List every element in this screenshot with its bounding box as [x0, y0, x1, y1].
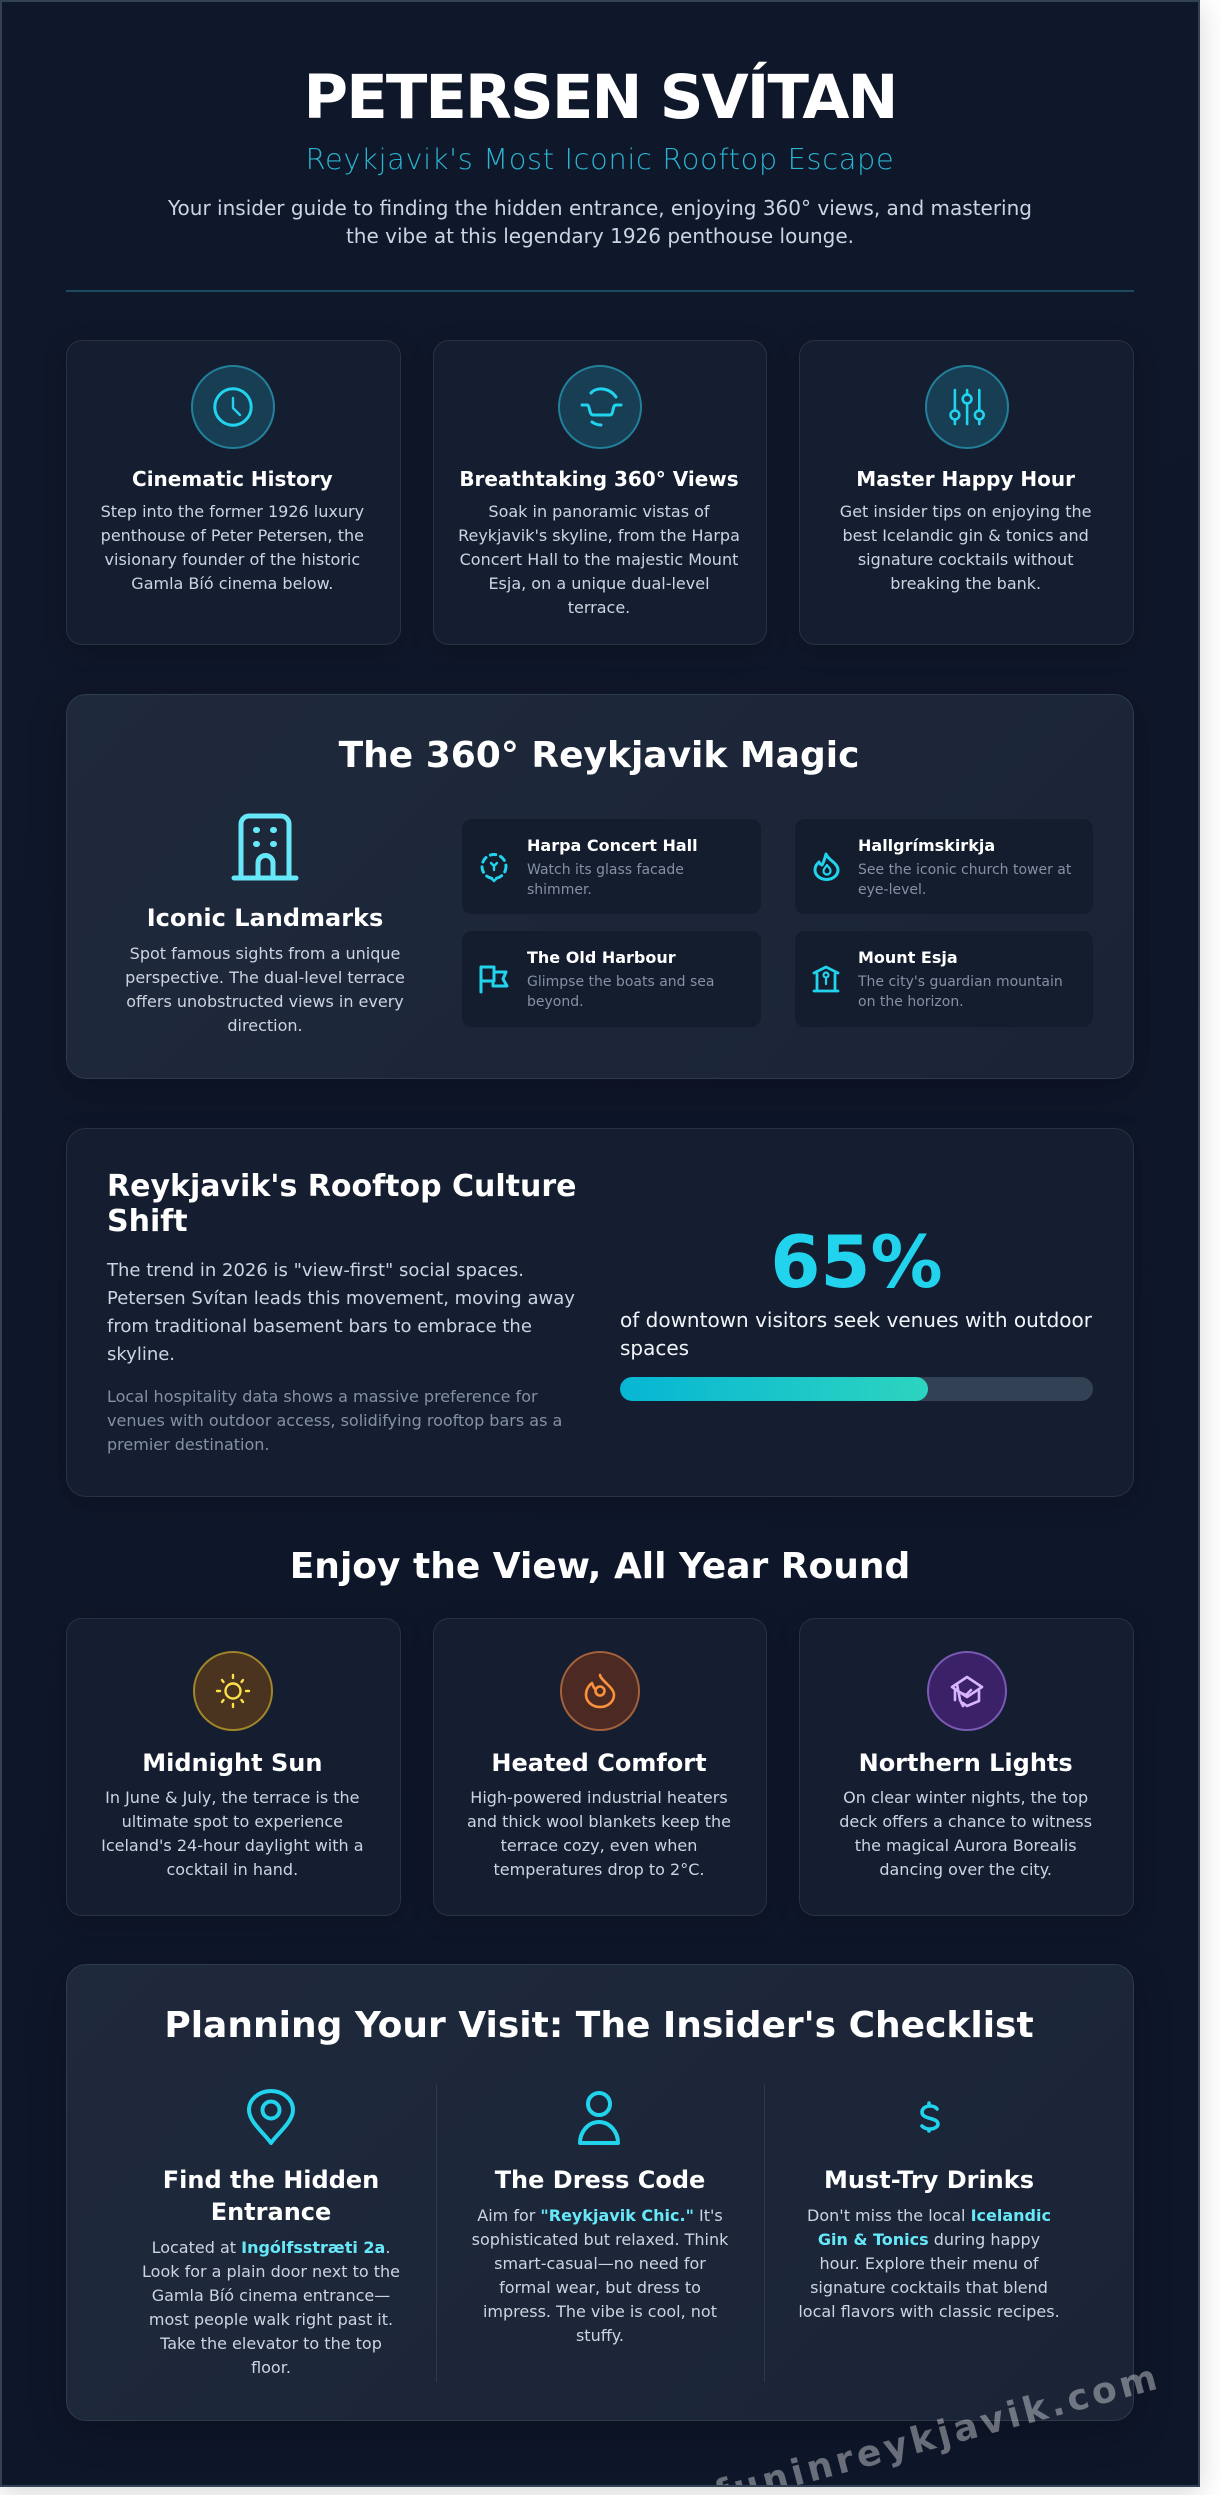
body text: Get insider tips on enjoying the [840, 502, 1092, 521]
body text: Esja, on a unique dual-level [488, 574, 710, 593]
body text: formal wear, but dress to [499, 2278, 701, 2297]
icon: clock [191, 365, 275, 449]
body text: smart-casual—no need for [494, 2254, 706, 2273]
description: Watch its glass facade [527, 862, 684, 878]
body text: offers unobstructed views in every [126, 992, 404, 1011]
body text: Gamla Bíó cinema entrance— [152, 2286, 390, 2305]
body text: dancing over the city. [879, 1860, 1052, 1879]
heading [163, 2166, 379, 2226]
panel: heated comfort [433, 1618, 767, 1916]
landmark: harpa [462, 819, 761, 914]
icon: map pin [247, 2089, 295, 2146]
heading: Heated Comfort [491, 1749, 707, 1777]
intro text [168, 196, 1032, 248]
body text: direction. [227, 1016, 303, 1035]
panel: midnight sun [66, 1618, 401, 1916]
column: must-try drinks [798, 2166, 1060, 2321]
panel: northern lights [799, 1618, 1134, 1916]
body text: On clear winter nights, the top [843, 1788, 1088, 1807]
icon: aurora [927, 1651, 1007, 1731]
body text [106, 1260, 575, 1365]
body text: best Icelandic gin & tonics and [842, 526, 1089, 545]
body text [840, 502, 1092, 593]
description: See the iconic church tower at [858, 862, 1071, 878]
icon: building [232, 814, 298, 880]
body text: Reykjavik's skyline, from the Harpa [458, 526, 740, 545]
name: Mount Esja [858, 948, 958, 967]
body text [101, 502, 364, 593]
body text: and thick wool blankets keep the [467, 1812, 731, 1831]
body text [458, 502, 740, 617]
description: shimmer. [527, 882, 592, 898]
heading: Planning Your Visit: The Insider's Checklist [164, 2005, 1034, 2046]
body text: signature cocktails that blend [810, 2278, 1048, 2297]
stat caption [620, 1308, 1092, 1360]
body text [467, 1788, 731, 1879]
body text: deck offers a chance to witness [839, 1812, 1092, 1831]
supporting text: premier destination. [107, 1435, 270, 1454]
heading: The Dress Code [495, 2166, 705, 2194]
body text: Gamla Bíó cinema below. [131, 574, 333, 593]
description [527, 862, 684, 898]
icon: panorama [558, 365, 642, 449]
stat: 65%: 65% [770, 1220, 943, 1304]
body text: skyline. [107, 1344, 175, 1365]
body text: breaking the bank. [890, 574, 1041, 593]
body text: Concert Hall to the majestic Mount [460, 550, 738, 569]
body text: the magical Aurora Borealis [855, 1836, 1077, 1855]
body text: most people walk right past it. [149, 2310, 393, 2329]
landmark: hallgrimskirkja [795, 819, 1093, 914]
heading: Shift [107, 1204, 188, 1239]
icon: flag [480, 966, 509, 994]
panel: 360 magic [66, 694, 1134, 1079]
body text: Spot famous sights from a unique [130, 944, 400, 963]
body text: Soak in panoramic vistas of [488, 502, 710, 521]
body text: Step into the former 1926 luxury [101, 502, 364, 521]
icon: dollar [920, 2101, 940, 2133]
body text: Aim for "Reykjavik Chic." It's [477, 2206, 723, 2225]
name: Hallgrímskirkja [858, 836, 995, 855]
panel: cinematic history [66, 340, 401, 645]
body text: Don't miss the local Icelandic [807, 2206, 1051, 2225]
body text: local flavors with classic recipes. [798, 2302, 1060, 2321]
icon: flame [814, 852, 840, 881]
body text: stuffy. [576, 2326, 624, 2345]
column: hidden entrance [142, 2166, 400, 2377]
heading: Northern Lights [859, 1749, 1073, 1777]
body text: High-powered industrial heaters [470, 1788, 728, 1807]
body text: signature cocktails without [858, 550, 1073, 569]
body text [472, 2206, 728, 2345]
title: PETERSEN SVÍTAN [304, 63, 896, 133]
supporting text: venues with outdoor access, solidifying rooftop bars as a [107, 1411, 562, 1430]
body text: temperatures drop to 2°C. [493, 1860, 704, 1879]
stat caption: spaces [620, 1336, 689, 1360]
intro text: Your insider guide to finding the hidden entrance, enjoying 360° views, and mastering [168, 196, 1032, 220]
heading: The 360° Reykjavik Magic [339, 735, 859, 776]
body text: Located at Ingólfsstræti 2a. [152, 2238, 390, 2257]
supporting text [107, 1387, 562, 1454]
landmark: old harbour [462, 931, 761, 1027]
name: Harpa Concert Hall [527, 836, 698, 855]
description: on the horizon. [858, 994, 964, 1010]
body text: Gin & Tonics during happy [818, 2230, 1040, 2249]
icon: museum [812, 966, 840, 992]
progress bar [620, 1377, 1093, 1401]
heading: Find the Hidden [163, 2166, 379, 2194]
body text: sophisticated but relaxed. Think [472, 2230, 728, 2249]
body text: cocktail in hand. [166, 1860, 298, 1879]
description: The city's guardian mountain [858, 974, 1063, 990]
heading: Reykjavik's Rooftop Culture [107, 1169, 576, 1204]
icon: flame [560, 1651, 640, 1731]
description [527, 974, 714, 1010]
body text [125, 944, 405, 1035]
progress fill 65% [620, 1377, 928, 1401]
stat caption: of downtown visitors seek venues with outdoor [620, 1308, 1092, 1332]
body text: Look for a plain door next to the [142, 2262, 400, 2281]
panel: checklist [66, 1964, 1134, 2421]
panel: 360 views [433, 340, 767, 645]
description: eye-level. [858, 882, 926, 898]
heading: Must-Try Drinks [824, 2166, 1034, 2194]
body text: impress. The vibe is cool, not [483, 2302, 717, 2321]
body text: hour. Explore their menu of [819, 2254, 1039, 2273]
subtitle: Reykjavik's Most Iconic Rooftop Escape [306, 142, 894, 176]
body text [142, 2238, 400, 2377]
heading: year round: Enjoy the View, All Year Round [290, 1546, 910, 1587]
icon: sun [193, 1651, 273, 1731]
supporting text: Local hospitality data shows a massive preference for [107, 1387, 538, 1406]
body text: The trend in 2026 is "view-first" social spaces. [107, 1260, 524, 1281]
heading: Cinematic History [132, 467, 333, 491]
body text [798, 2206, 1060, 2321]
body text: Iceland's 24-hour daylight with a [101, 1836, 364, 1855]
icon: person [578, 2091, 620, 2145]
landmark: mount esja [795, 931, 1093, 1027]
icon: sliders [925, 365, 1009, 449]
body text: In June & July, the terrace is the [105, 1788, 360, 1807]
body text: perspective. The dual-level terrace [125, 968, 405, 987]
body text: from traditional basement bars to embrace the [107, 1316, 532, 1337]
body text: floor. [251, 2358, 291, 2377]
heading: iconic landmarks: Iconic Landmarks [147, 904, 383, 932]
body text: terrace cozy, even when [501, 1836, 697, 1855]
heading: Breathtaking 360° Views [459, 467, 739, 491]
description: beyond. [527, 994, 584, 1010]
column: dress code [472, 2166, 728, 2345]
description: Glimpse the boats and sea [527, 974, 714, 990]
panel: rooftop culture [66, 1128, 1134, 1497]
description [858, 862, 1071, 898]
description [858, 974, 1063, 1010]
name: The Old Harbour [527, 948, 676, 967]
icon: harpa [480, 853, 508, 882]
heading [107, 1169, 576, 1239]
heading: Midnight Sun [142, 1749, 322, 1777]
heading: Entrance [211, 2198, 331, 2226]
heading: Master Happy Hour [856, 467, 1075, 491]
body text [101, 1788, 364, 1879]
intro text: the vibe at this legendary 1926 penthouse lounge. [346, 224, 854, 248]
body text [839, 1788, 1092, 1879]
panel: happy hour [799, 340, 1134, 645]
body text: ultimate spot to experience [122, 1812, 343, 1831]
body text: Take the elevator to the top [160, 2334, 382, 2353]
body text: visionary founder of the historic [105, 550, 360, 569]
body text: Petersen Svítan leads this movement, moving away [107, 1288, 575, 1309]
body text: terrace. [568, 598, 630, 617]
body text: penthouse of Peter Petersen, the [101, 526, 364, 545]
